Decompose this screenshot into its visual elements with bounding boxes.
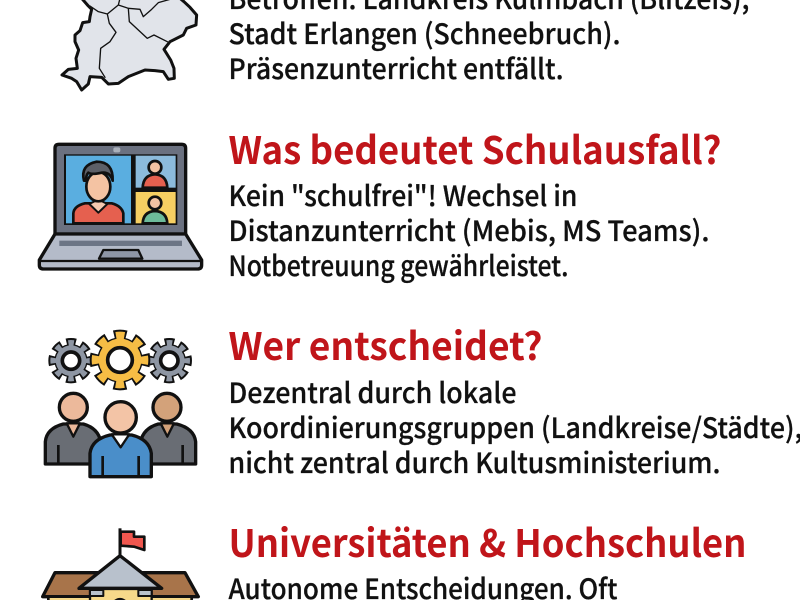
text: Distanzunterricht: Distanzunterricht (Mebis, MS Teams).: [228, 210, 710, 250]
icon: laptop with video call: [39, 144, 202, 269]
text: Koordinierungsgruppen: Dezentral durch lokale: [228, 372, 516, 412]
text: betroffene Regionen: Stadt Erlangen (Schneebruch).: [228, 13, 620, 53]
heading: Wer entscheidet: Wer entscheidet?: [228, 316, 542, 371]
text: Distanzunterricht: Kein "schulfrei"! Wechsel in: [228, 175, 578, 215]
icon: gears and people: [45, 337, 196, 477]
heading: Was bedeutet Schulausfall: Was bedeutet Schulausfall?: [228, 120, 722, 175]
text: betroffene Regionen: [228, 0, 750, 88]
text: Koordinierungsgruppen: [228, 372, 800, 482]
text: Distanzunterricht: [228, 175, 710, 285]
panel: Wer entscheidet: [45, 316, 800, 482]
text: Koordinierungsgruppen: nicht zentral durch Kultusministerium.: [228, 442, 720, 482]
text: betroffene Regionen: Präsenzunterricht entfällt.: [228, 48, 564, 88]
text: Distanzunterricht: Notbetreuung gewährleistet.: [228, 245, 568, 285]
panel: betroffene Regionen: [62, 0, 749, 90]
icon: university building: [43, 528, 198, 600]
panel: Was bedeutet Schulausfall: [39, 120, 722, 285]
heading: Universitäten und Hochschulen: Universitäten & Hochschulen: [228, 513, 746, 568]
panel: Universitäten und Hochschulen: [43, 513, 746, 600]
icon: map of Bavaria: [62, 0, 197, 90]
